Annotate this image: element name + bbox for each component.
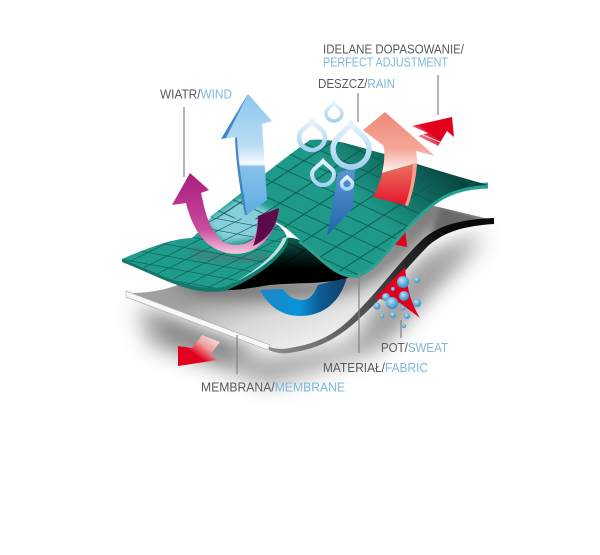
small red arrow lower left: [178, 335, 220, 366]
label: perfect adjustment: [323, 42, 464, 70]
membrane white front edge: [126, 291, 270, 350]
magenta wind arrow: [172, 173, 279, 254]
membrane layer: [126, 205, 494, 353]
drop 2: [299, 121, 325, 150]
fabric dark underside: [215, 238, 350, 290]
drop 1: [326, 103, 342, 121]
drop 3: [333, 124, 369, 167]
label: perfect adjustment: PERFECT ADJUSTMENT: [323, 56, 448, 70]
fabric rim: [300, 186, 488, 275]
label: membrane: MEMBRANA/MEMBRANE: [201, 380, 345, 394]
drop 5: [342, 177, 352, 189]
rain arrow column: [327, 167, 355, 236]
sweat droplets: [374, 276, 421, 328]
membrane dark edge: [269, 218, 494, 353]
blue loop under fabric: [260, 277, 347, 316]
soft shadow under membrane: [135, 232, 490, 385]
fabric left top surface: [122, 217, 287, 288]
lower red arrow stem through layers: [375, 205, 420, 318]
stripes on small arrow tail: [420, 135, 440, 145]
label: rain: DESZCZ/RAIN: [318, 77, 395, 91]
fabric pale edge: [232, 237, 288, 284]
label: fabric: MATERIAŁ/FABRIC: [323, 361, 428, 375]
fabric light patch: [205, 198, 275, 243]
label: sweat: POT/SWEAT: [381, 341, 448, 355]
fabric layer: [120, 130, 490, 295]
rain drops: [299, 103, 369, 189]
label: wind: WIATR/WIND: [160, 88, 232, 102]
leader lines: [184, 75, 438, 374]
fabric mesh: [216, 142, 477, 275]
light blue wind arrow: [221, 94, 272, 215]
drop 4: [312, 161, 334, 185]
salmon-red perfect adjustment arrow: [363, 112, 435, 206]
membrane shade cast by fabric: [180, 205, 493, 291]
infographic: layered fabric diagram: [122, 44, 494, 397]
label: perfect adjustment: IDELANE DOPASOWANIE/: [323, 42, 464, 56]
small red arrow upper right: [412, 117, 454, 146]
fabric right top surface: [210, 140, 488, 275]
